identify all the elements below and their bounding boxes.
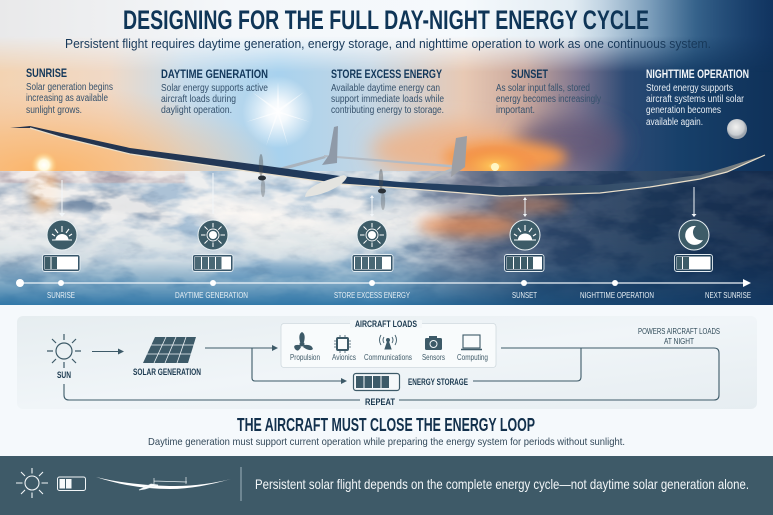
timeline: NEXT SUNRISE — [705, 290, 751, 300]
label: sun: SUN — [57, 370, 71, 380]
icon: sun — [47, 334, 81, 368]
divider — [240, 467, 242, 501]
text block: sunset: SUNSET — [511, 67, 548, 81]
cloud base — [0, 171, 773, 305]
lower blue fade — [0, 225, 773, 305]
battery: sunset — [504, 254, 544, 272]
orange lit clouds — [418, 197, 570, 237]
text block: nighttime operation: generation becomes — [646, 105, 721, 116]
moon — [727, 119, 747, 139]
arrow: sun to solar — [92, 348, 124, 354]
timeline: DAYTIME GENERATION — [175, 290, 248, 300]
text block: daytime generation: daylight operation. — [161, 105, 232, 116]
cloud texture light — [0, 171, 773, 305]
text block: sunset: energy becomes increasingly — [496, 94, 601, 105]
distant mountain — [55, 188, 182, 224]
panel: hero day-night sky — [0, 0, 773, 305]
text block: daytime generation: Solar energy supports active — [161, 83, 268, 94]
text block: daytime generation: DAYTIME GENERATION — [161, 67, 268, 81]
large cloud masses — [0, 168, 445, 267]
label: energy storage: ENERGY STORAGE — [408, 377, 468, 387]
aircraft — [10, 126, 765, 210]
battery: storage — [352, 254, 393, 272]
timeline — [16, 279, 751, 300]
sunset glow band — [443, 141, 567, 173]
night and repeat loop lines — [64, 348, 719, 400]
box: aircraft loads: Computing — [457, 353, 488, 362]
tail fins and booms — [275, 126, 467, 186]
panel background — [17, 316, 757, 409]
label: powers aircraft loads at night: AT NIGHT — [664, 337, 694, 346]
icon: communications antenna — [380, 335, 396, 349]
midday sun with rays — [242, 76, 314, 148]
text block: store excess energy: STORE EXCESS ENERGY — [331, 67, 442, 81]
text block: store excess energy: contributing energy to storage. — [331, 105, 444, 116]
text block: store excess energy — [331, 67, 444, 116]
text block: nighttime operation: Stored energy supports — [646, 83, 733, 94]
wing lower edge highlight — [30, 128, 765, 196]
text block: store excess energy: support immediate loads while — [331, 94, 444, 105]
box: aircraft loads: Sensors — [422, 353, 445, 362]
sunset sun core — [491, 163, 499, 171]
icon: sunset — [510, 220, 540, 250]
fuselage — [305, 175, 347, 197]
icon: footer sun — [16, 468, 48, 498]
icon: daytime sun — [198, 220, 228, 250]
text block: nighttime operation — [646, 67, 749, 128]
text block: sunrise: sunlight grows. — [26, 105, 82, 116]
body: energy loop: Daytime generation must support current operation while preparing the energy system for periods without sunlight. — [148, 436, 625, 448]
text block: daytime generation: aircraft loads during — [161, 94, 236, 105]
sunset sun — [460, 156, 534, 171]
icon: moon — [679, 220, 709, 250]
sunset peach wash — [370, 124, 540, 176]
sky glows — [0, 98, 630, 171]
text block: sunset: As solar input falls, stored — [496, 83, 590, 94]
footer background — [0, 456, 773, 515]
text block: store excess energy: Available daytime energy can — [331, 83, 440, 94]
text block: sunrise — [26, 66, 113, 116]
icon: footer aircraft — [96, 477, 231, 490]
icon: sunrise — [47, 220, 77, 250]
horizon band left — [0, 171, 185, 183]
box: aircraft loads — [281, 319, 496, 368]
battery: daytime — [192, 254, 233, 272]
propeller left — [258, 154, 266, 197]
box: aircraft loads: Avionics — [332, 353, 356, 362]
purple dusk band — [515, 118, 625, 166]
box: aircraft loads: Propulsion — [290, 353, 320, 362]
battery: sunrise — [42, 254, 80, 272]
icon: energy storage battery — [354, 374, 400, 390]
timeline: SUNSET — [512, 290, 537, 300]
box: aircraft loads: AIRCRAFT LOADS — [355, 319, 417, 329]
panel: footer banner — [0, 456, 773, 515]
icon: sensors camera — [425, 336, 442, 350]
top haze behind title — [0, 0, 773, 72]
text block: sunset — [496, 67, 601, 116]
text block: sunrise: Solar generation begins — [26, 82, 113, 93]
sunrise glow — [0, 98, 266, 171]
icon: computing laptop — [461, 335, 482, 350]
timeline: NIGHTTIME OPERATION — [580, 290, 654, 300]
sky gradient — [0, 0, 773, 180]
text block: sunrise: SUNRISE — [26, 66, 67, 80]
text block: daytime generation — [161, 67, 268, 116]
heading: energy loop: THE AIRCRAFT MUST CLOSE THE ENERGY LOOP — [237, 415, 535, 435]
timeline: STORE EXCESS ENERGY — [334, 290, 410, 300]
label: powers aircraft loads at night: POWERS AIRCRAFT LOADS — [638, 327, 720, 336]
icon: footer battery — [58, 477, 86, 490]
icon: storage sun — [357, 220, 387, 250]
label: powers aircraft loads at night — [638, 327, 720, 346]
panel: energy loop diagram — [17, 316, 757, 409]
sunrise sun — [33, 154, 55, 171]
battery: nighttime — [674, 254, 712, 272]
propeller right — [378, 169, 386, 210]
box: aircraft loads: Communications — [364, 353, 412, 362]
sunrise reflection — [30, 168, 58, 212]
icon: solar panel — [143, 337, 196, 363]
icon: propulsion fan — [294, 332, 313, 351]
label: repeat: REPEAT — [365, 397, 395, 407]
label: solar generation: SOLAR GENERATION — [133, 367, 201, 377]
subtitle: Persistent flight requires daytime generation, energy storage, and nighttime operation to work as one continuous system. — [65, 36, 711, 51]
solar wing — [10, 126, 765, 196]
text block: nighttime operation: available again. — [646, 117, 703, 128]
icon: avionics chip — [334, 335, 351, 353]
connector lines to icons — [59, 173, 696, 217]
cloud texture dark — [0, 171, 773, 305]
text block: sunrise: increasing as available — [26, 93, 108, 104]
text block: sunset: important. — [496, 105, 535, 116]
text block: nighttime operation: aircraft systems until solar — [646, 94, 745, 105]
timeline: SUNRISE — [47, 290, 75, 300]
arrows: solar to loads and storage — [205, 345, 347, 384]
